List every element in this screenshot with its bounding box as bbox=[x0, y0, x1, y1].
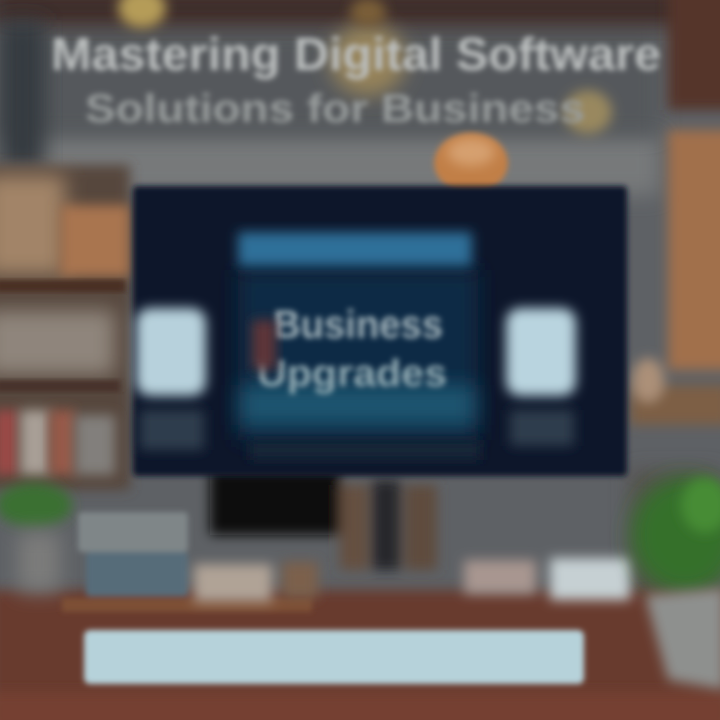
orange lamp bbox=[434, 133, 508, 193]
screen heading bbox=[238, 232, 472, 266]
screen text bbox=[257, 303, 447, 395]
screen text: Upgrades bbox=[257, 353, 447, 395]
monitor bbox=[133, 186, 627, 476]
bookshelf left bbox=[0, 165, 130, 490]
desk bbox=[0, 590, 720, 720]
left plant bbox=[0, 483, 72, 592]
left phone card bbox=[136, 308, 206, 450]
right phone card bbox=[506, 308, 576, 446]
screen centre panel bbox=[238, 232, 478, 440]
screen text: Business bbox=[273, 303, 443, 347]
desk papers bbox=[194, 558, 630, 602]
wood panel right bbox=[630, 0, 720, 425]
title: Mastering Digital Software bbox=[51, 28, 661, 80]
hanging lamps bbox=[118, 0, 612, 134]
keyboard bbox=[84, 630, 584, 684]
right plant bbox=[631, 477, 720, 690]
title: Solutions for Business bbox=[85, 87, 585, 131]
title bbox=[51, 28, 661, 131]
book stack bbox=[62, 512, 312, 612]
monitor stand bbox=[210, 470, 437, 570]
